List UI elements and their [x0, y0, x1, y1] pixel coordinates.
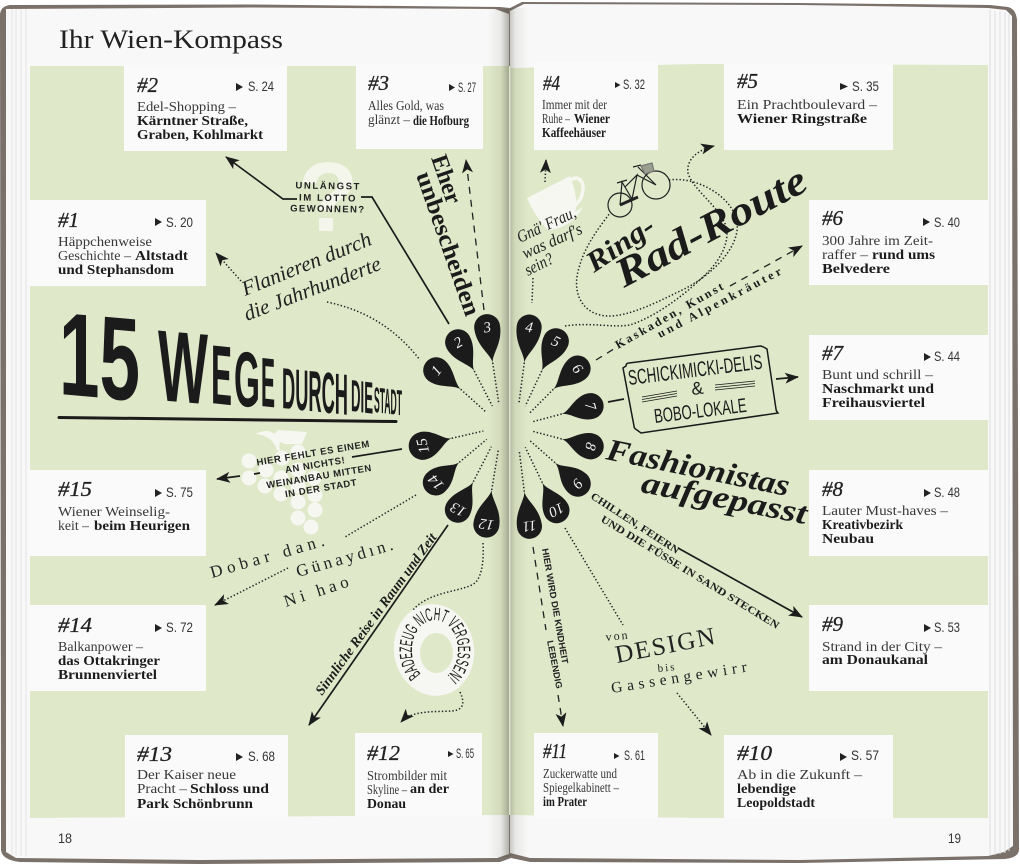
card 11: Zuckerwatte und	[543, 766, 617, 781]
card 15	[30, 470, 206, 556]
vertical text: Eher unbescheiden: Eher	[425, 151, 466, 208]
left page	[6, 8, 509, 860]
callout: Unlängst im Lotto gewonnen: IM LOTTO	[299, 192, 357, 205]
card 11: #11	[543, 739, 567, 763]
card 5: S. 35	[852, 78, 879, 94]
text: Dobar dan. Günaydın. Ni hao: Ni hao	[281, 571, 354, 611]
dotted line: pin 4	[532, 278, 533, 303]
card 14	[30, 605, 206, 691]
card 13: Der Kaiser neue	[137, 767, 236, 782]
card 2: Graben, Kohlmarkt	[137, 127, 264, 142]
text: Flanieren durch die Jahrhunderte: die Jahrhunderte	[240, 251, 384, 326]
card 15: S. 75	[166, 484, 193, 500]
card 4: #4	[543, 71, 560, 95]
text: von Design bis Gassengewirr: bis	[657, 661, 677, 675]
pin 3: 3	[481, 320, 492, 337]
text: Chillen, feiern und die Füsse in Sand stecken	[588, 491, 782, 632]
icon: question mark: ?	[298, 142, 358, 252]
pin 3	[472, 312, 506, 365]
card 8: S. 48	[934, 484, 960, 500]
arrow: dashed to card 3	[466, 160, 484, 310]
pin 4: 4	[524, 320, 534, 337]
text: Flanieren durch die Jahrhunderte: Flanieren durch	[237, 227, 375, 301]
text: Fashionistas aufgepasst	[602, 431, 812, 531]
card 5: Wiener Ringstraße	[737, 111, 867, 126]
card 6: rund ums	[872, 247, 935, 262]
pin 5	[530, 324, 573, 377]
pin 1: 1	[428, 363, 446, 379]
card 3: S. 27	[458, 79, 476, 95]
card 11: im Prater	[543, 794, 587, 809]
arrow: to card 7	[776, 377, 798, 379]
arrow: dotted to card 4	[545, 160, 546, 182]
arrow: solid from pin 13 to card 13	[309, 525, 448, 725]
card 3: #3	[368, 71, 389, 95]
icon: swim ring: BADEZEUG NICHT VERGESSEN!	[400, 608, 470, 684]
headline: 15 Wege durch die Stadt: E	[211, 327, 232, 423]
pin 7	[558, 390, 607, 427]
dotted line: pin 10 to Design	[565, 528, 623, 625]
pin 15: 15	[414, 436, 433, 455]
card 6	[809, 200, 988, 285]
card 9: #9	[822, 612, 844, 636]
callout: Hier fehlt es einem an Nichts: AN NICHTS!	[284, 455, 346, 476]
card 13	[125, 735, 288, 819]
card 1: Altstadt	[135, 248, 189, 263]
pin 9	[546, 453, 596, 502]
card 9: Strand in der City –	[822, 639, 942, 654]
sign: Schickimicki-Delis & Bobo-Lokale: &	[690, 378, 704, 399]
pin 10: 10	[545, 499, 566, 520]
text: Kaskaden, Kunst und Alpenkräuter	[613, 264, 784, 352]
card 7: Bunt und schrill –	[822, 367, 933, 382]
card 1	[30, 200, 206, 286]
text: Gnä' Frau, was darf's sein?: sein?	[521, 249, 557, 280]
headline underline	[59, 418, 396, 422]
card 12: #12	[367, 741, 401, 765]
pin 7: 7	[581, 401, 599, 414]
card 15: #15	[58, 477, 92, 501]
dotted line: pin 14	[345, 495, 416, 537]
card 3: die Hofburg	[413, 113, 469, 128]
text: Fashionistas aufgepasst: Fashionistas	[602, 431, 793, 503]
card 6: 300 Jahre im Zeit-	[822, 233, 934, 248]
card 5	[724, 64, 893, 150]
card 14: Balkanpower –	[58, 639, 143, 654]
card 6: raffer –	[822, 247, 868, 262]
card 6: Belvedere	[822, 261, 890, 276]
callout: Hier fehlt es einem an Nichts: WEINANBAU MITTEN	[266, 463, 373, 491]
line: pin 2 to callout	[361, 197, 449, 324]
card 3	[356, 64, 483, 149]
dotted line: pin 12 to ring	[413, 543, 483, 610]
left page stack	[12, 9, 26, 857]
callout: Hier fehlt es einem an Nichts: IN DER STADT	[284, 477, 358, 500]
sign: Schickimicki-Delis & Bobo-Lokale: BOBO-LOKALE	[653, 395, 748, 428]
card 5: #5	[737, 69, 758, 93]
card 8: #8	[822, 477, 844, 501]
sign: Schickimicki-Delis & Bobo-Lokale	[623, 346, 778, 433]
card 1: Häppchenweise	[58, 234, 152, 249]
text: Ring-Rad-Route: Rad-Route	[606, 156, 815, 296]
card 13: S. 68	[248, 748, 275, 764]
pin 6	[545, 350, 596, 399]
sign: Schickimicki-Delis & Bobo-Lokale: SCHICKIMICKI-DELIS	[627, 351, 764, 390]
pin 2: 2	[451, 334, 466, 352]
card 2: S. 24	[248, 78, 274, 94]
card 12: an der	[410, 781, 449, 796]
arrow: dashed to card 6	[730, 246, 802, 286]
callout: Unlängst im Lotto gewonnen: UNLÄNGST	[295, 180, 361, 193]
green background: right page	[511, 64, 988, 818]
card 15: keit –	[58, 518, 89, 533]
text: von Design bis Gassengewirr: von	[605, 628, 630, 644]
pin 2	[440, 325, 486, 377]
text: von Design bis Gassengewirr: Gassengewirr	[610, 659, 749, 697]
text: Ring-Rad-Route	[579, 156, 815, 296]
card 10: Leopoldstadt	[737, 795, 816, 810]
card 14: Brunnenviertel	[58, 667, 157, 682]
pin 13: 13	[448, 498, 469, 519]
arrow: to card 9	[678, 548, 802, 617]
arrow: dotted to card 14	[215, 568, 288, 605]
text: Dobar dan. Günaydın. Ni hao: Günaydın.	[294, 534, 398, 581]
headline: 15 Wege durch die Stadt: G	[234, 334, 260, 425]
card 10: Ab in die Zukunft –	[737, 767, 862, 782]
headline: 15 Wege durch die Stadt: E	[261, 342, 275, 422]
right page	[510, 4, 1013, 860]
card 7: Naschmarkt und	[822, 381, 935, 396]
card 10: #10	[737, 741, 773, 765]
card 10	[724, 735, 893, 818]
card 9: S. 53	[934, 619, 960, 635]
headline: 15 Wege durch die Stadt: W	[158, 309, 208, 426]
page number 18: 18	[58, 830, 72, 846]
card 13: #13	[137, 742, 172, 766]
card 6: #6	[822, 206, 844, 230]
card 14: das Ottakringer	[58, 653, 160, 668]
text: Kaskaden, Kunst und Alpenkräuter: und Alpenkräuter	[655, 264, 784, 341]
card 13: Pracht –	[137, 781, 187, 796]
card 4: Kaffeehäuser	[542, 125, 606, 140]
arrow: dashed to card 11	[558, 695, 563, 726]
text: Dobar dan. Günaydın. Ni hao: Dobar dan.	[208, 530, 329, 582]
dotted route: pin 5	[565, 146, 727, 326]
pin 4	[512, 313, 543, 364]
text: Chillen, feiern und die Füsse in Sand stecken: UND DIE FÜSSE IN SAND STECKEN	[598, 512, 782, 632]
card 15: beim Heurigen	[94, 518, 191, 533]
text: Hier wird die Kindheit lebendig: LEBENDIG	[545, 639, 564, 689]
card 13: Park Schönbrunn	[137, 796, 254, 811]
card 7: S. 44	[934, 348, 960, 364]
card 15: Wiener Weinselig-	[58, 504, 171, 519]
pin 8	[559, 426, 607, 462]
card 1: #1	[58, 208, 79, 232]
text: Ring-Rad-Route: Ring-	[579, 210, 661, 279]
card 10: S. 57	[851, 747, 879, 763]
text: Kaskaden, Kunst und Alpenkräuter: Kaskaden, Kunst	[613, 279, 726, 352]
headline: 15 Wege durch die Stadt	[59, 288, 402, 428]
card 4	[534, 62, 658, 150]
card 2: #2	[137, 73, 158, 97]
green background: left page	[30, 66, 510, 818]
icon: bicycle	[608, 163, 670, 217]
pin 12: 12	[477, 514, 495, 533]
arrow: to card 2	[226, 157, 297, 199]
right page stack	[990, 10, 1009, 855]
card 12	[355, 733, 482, 816]
card 12: Strombilder mit	[367, 768, 447, 783]
headline: 15 Wege durch die Stadt: DIE	[351, 370, 373, 424]
card 11: Spiegelkabinett –	[543, 780, 619, 795]
card 7: #7	[822, 341, 844, 365]
card 11	[534, 733, 658, 818]
card 6: S. 40	[934, 214, 960, 230]
text: Gnä' Frau, was darf's sein?: was darf's	[519, 219, 585, 263]
text: Gnä' Frau, was darf's sein?	[514, 203, 585, 280]
card 1: und Stephansdom	[58, 262, 175, 277]
text: STADT	[374, 379, 402, 423]
arrow: dotted to card 10	[677, 693, 711, 735]
vertical text: Eher unbescheiden: unbescheiden	[410, 168, 485, 319]
page number 19: 19	[948, 830, 961, 846]
line: pin 7 to sign	[608, 399, 624, 402]
title: Ihr Wien-Kompass	[59, 25, 283, 54]
pin 8: 8	[581, 441, 598, 452]
pin 11: 11	[521, 516, 537, 534]
pin 11	[512, 490, 544, 541]
card 10: lebendige	[737, 781, 796, 796]
card 9: am Donaukanal	[822, 652, 928, 667]
card 5: Ein Prachtboulevard –	[737, 97, 877, 112]
card 4: Ruhe –	[542, 111, 570, 126]
pin 15	[406, 425, 455, 463]
card 8: Lauter Must-haves –	[822, 503, 948, 518]
dashed line: pin 11 upper part	[533, 547, 546, 630]
text: Chillen, feiern und die Füsse in Sand stecken: CHILLEN, FEIERN	[588, 491, 681, 557]
text: Dobar dan. Günaydın. Ni hao	[208, 530, 398, 611]
card 2: Kärntner Straße,	[137, 113, 248, 128]
headline: 15 Wege durch die Stadt: DURCH	[282, 356, 348, 428]
card 8: Neubau	[822, 531, 875, 546]
card 8: Kreativbezirk	[822, 517, 903, 532]
icon: grapes	[242, 430, 322, 534]
card 11: S. 61	[624, 747, 645, 763]
card 1: Geschichte –	[58, 248, 131, 263]
card 8	[809, 470, 988, 556]
pin 14	[417, 452, 468, 501]
pin 6: 6	[568, 361, 586, 378]
text: von Design bis Gassengewirr	[605, 623, 749, 697]
card 2: Edel-Shopping –	[137, 99, 236, 114]
card 14: S. 72	[166, 619, 193, 635]
headline: 15 Wege durch die Stadt: 15	[59, 288, 140, 427]
card 12: Donau	[367, 796, 407, 811]
dotted route loop	[577, 179, 737, 316]
pin 1	[418, 352, 469, 400]
pin 12	[472, 488, 505, 539]
pin 13	[440, 475, 485, 527]
callout: Unlängst im Lotto gewonnen: GEWONNEN?	[290, 203, 366, 216]
arrow: to card 15	[217, 473, 260, 479]
pin 10	[531, 477, 574, 528]
callout: Unlängst im Lotto gewonnen	[290, 180, 366, 216]
arrow: dotted to card 12	[401, 692, 463, 722]
card 3: Alles Gold, was	[368, 98, 444, 113]
pin 9: 9	[568, 475, 585, 492]
card 4: Immer mit der	[542, 97, 607, 112]
card 7	[809, 335, 988, 420]
dashed line: pin 6	[596, 347, 617, 360]
pin 5: 5	[549, 333, 563, 351]
line: pin 15 to callout	[352, 449, 402, 457]
callout: Hier fehlt es einem an Nichts: HIER FEHLT ES EINEM	[256, 439, 371, 469]
icon: coffee cup	[527, 176, 583, 230]
card 9	[809, 605, 988, 691]
text: Sinnliche Reise in Raum und Zeit: Sinnliche Reise in Raum und Zeit	[313, 530, 441, 698]
text: von Design bis Gassengewirr: DESIGN	[613, 623, 717, 669]
card 14: #14	[58, 613, 93, 637]
card 2	[124, 65, 287, 151]
card 12: Skyline –	[367, 782, 407, 797]
card 12: S. 65	[456, 745, 474, 761]
spine shadow left	[488, 9, 509, 857]
dotted spokes to pins	[452, 363, 562, 492]
card 3: glänzt –	[368, 112, 410, 127]
card 7: Freihausviertel	[822, 395, 925, 410]
card 13: Schloss und	[190, 781, 270, 796]
pin 14: 14	[425, 471, 447, 493]
dotted line: pin 1	[327, 302, 420, 360]
callout: Hier fehlt es einem an Nichts	[256, 439, 377, 504]
text: Gnä' Frau, was darf's sein?: Gnä' Frau,	[514, 203, 579, 247]
text: Hier wird die Kindheit lebendig: HIER WIRD DIE KINDHEIT	[540, 548, 570, 665]
card 1: S. 20	[166, 214, 193, 230]
spine shadow right	[510, 8, 528, 856]
text: Fashionistas aufgepasst: aufgepasst	[639, 465, 812, 531]
card 4: Wiener	[574, 111, 610, 126]
arrow: dotted to card 1	[216, 253, 241, 281]
card 4: S. 32	[623, 76, 645, 92]
